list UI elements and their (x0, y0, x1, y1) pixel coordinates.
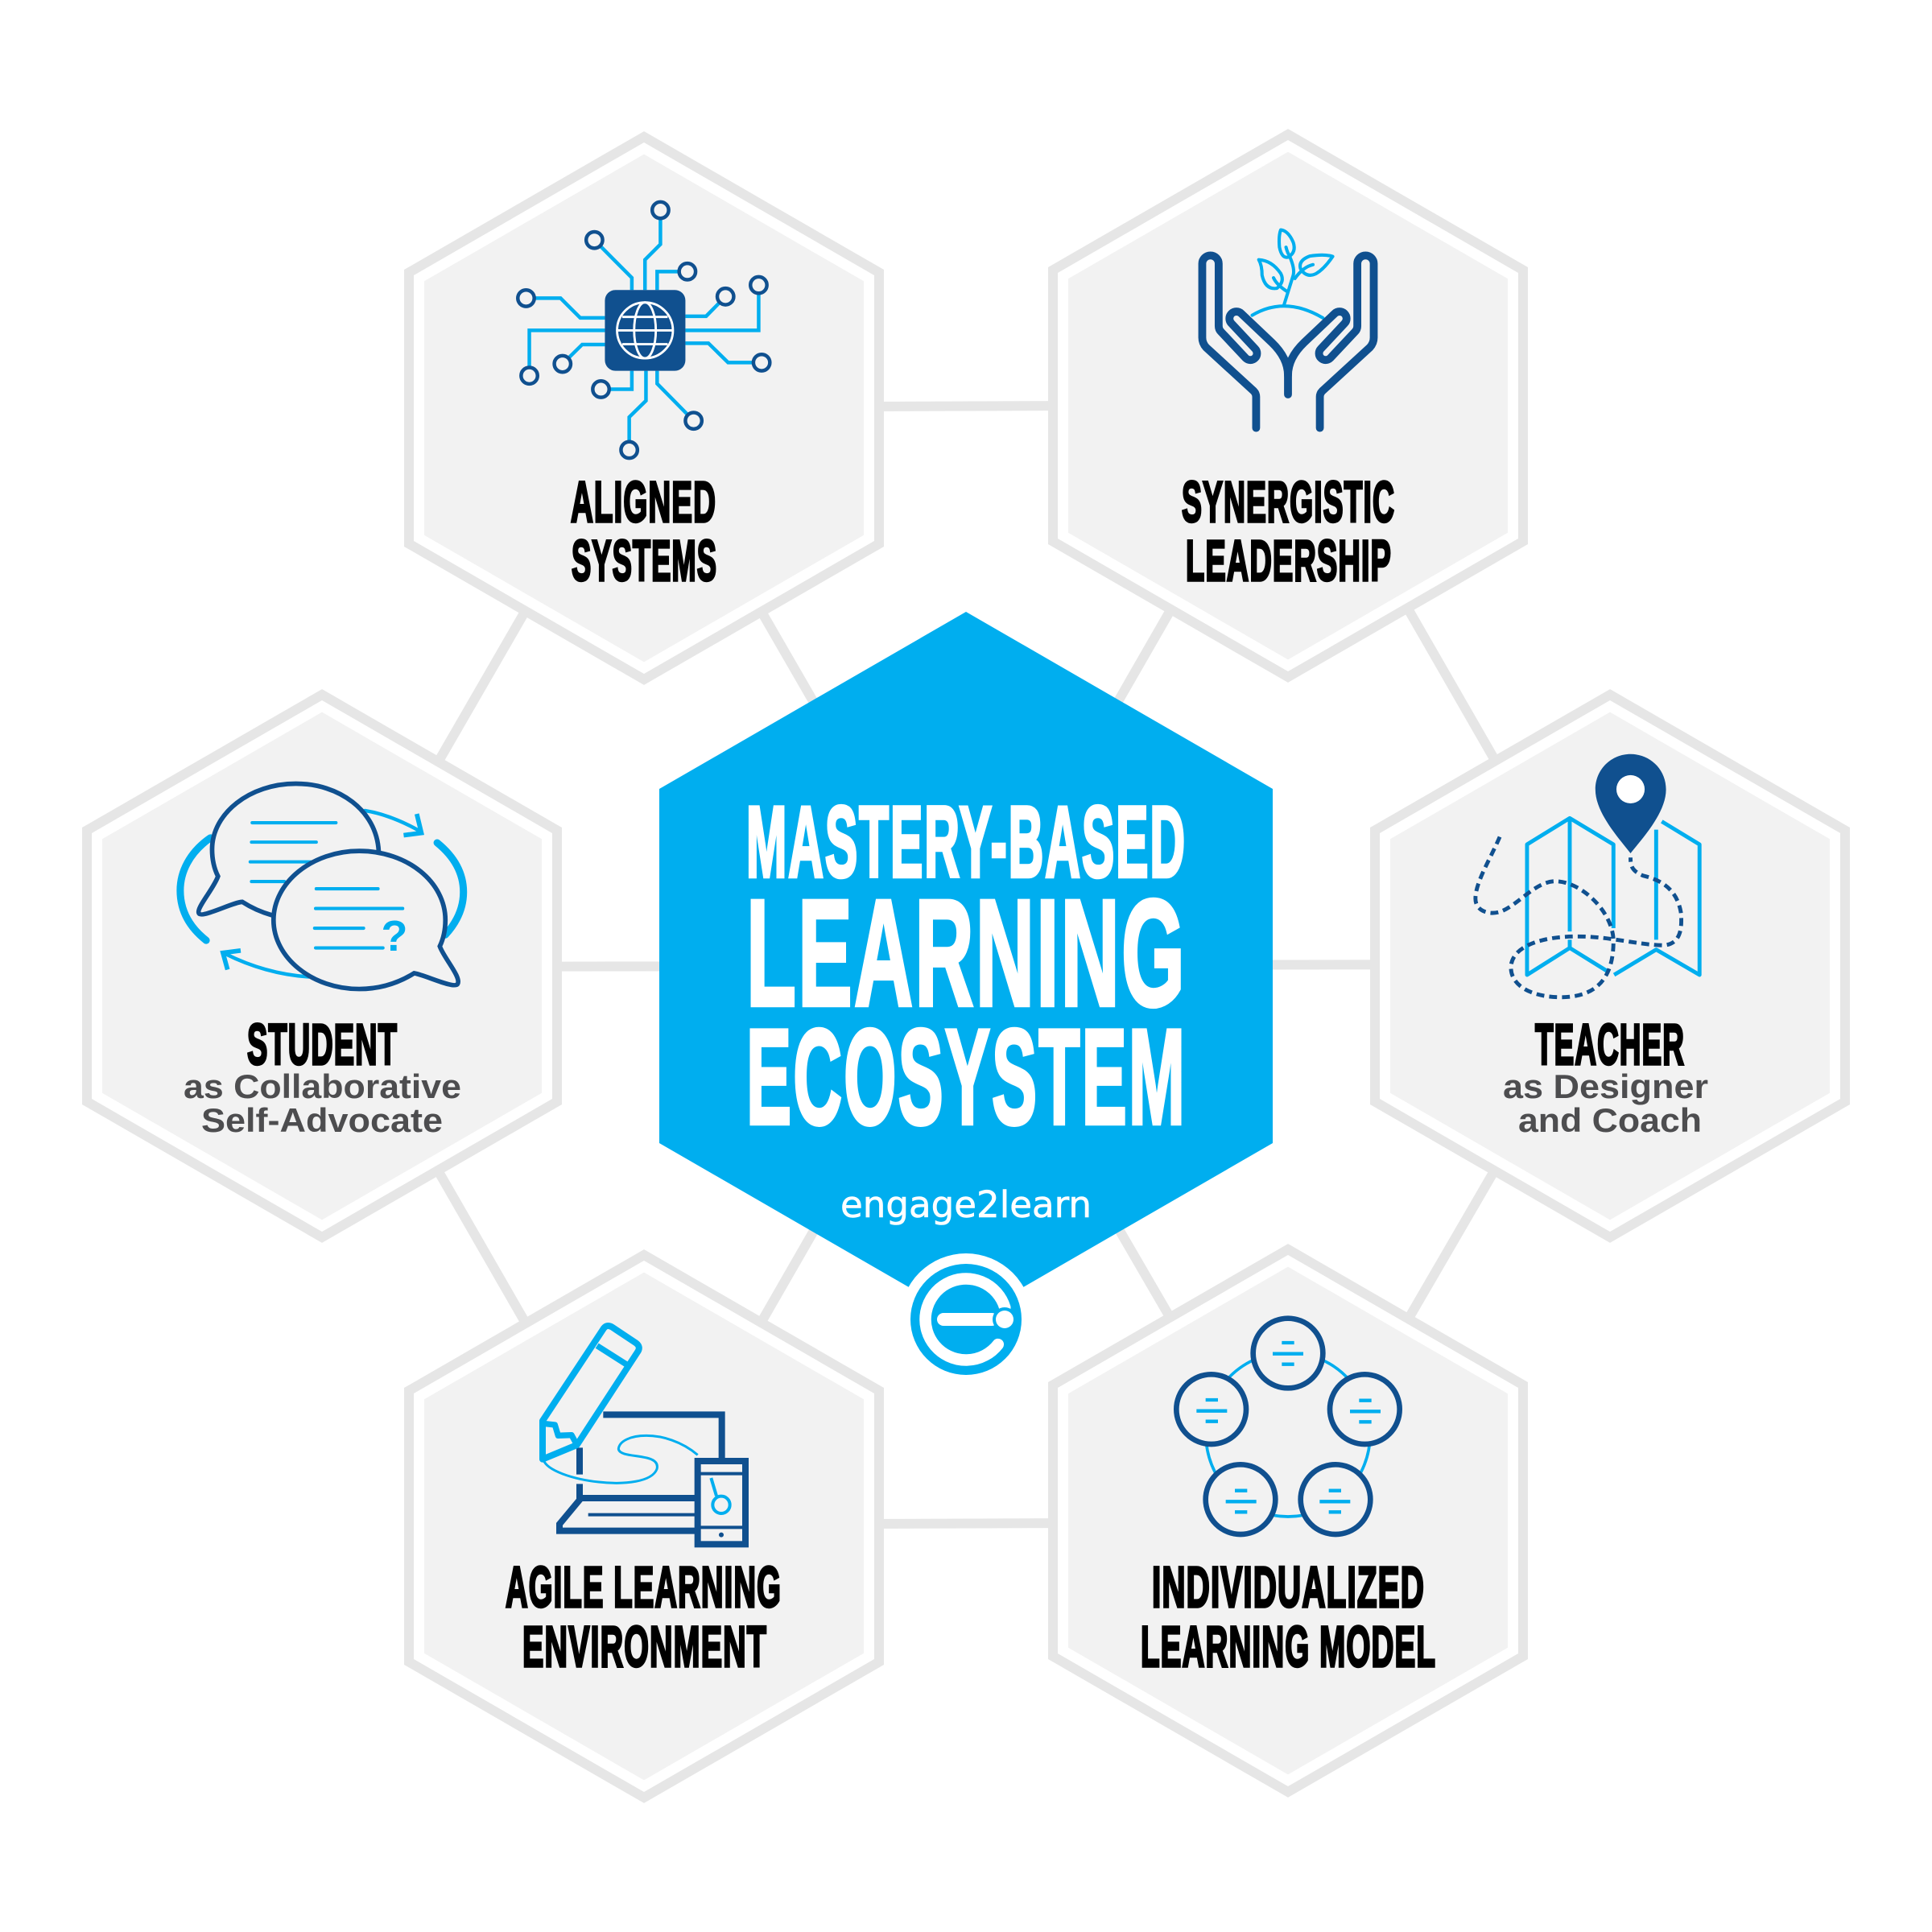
heading: synergistic leadership: SYNERGISTIC (1182, 471, 1395, 535)
heading: aligned systems (571, 471, 717, 593)
heading: teacher: TEACHER (1535, 1013, 1685, 1077)
panel: agile learning environment (409, 1255, 879, 1798)
panel: teacher (1375, 695, 1845, 1237)
panel: central hexagon: MASTERY-BASED (746, 786, 1187, 898)
panel: aligned systems (409, 137, 879, 679)
heading: individualized learning model (1141, 1556, 1436, 1679)
panel: central hexagon: ECOSYSTEM (746, 1001, 1187, 1153)
heading: individualized learning model: LEARNING MODEL (1141, 1616, 1436, 1679)
heading: synergistic leadership (1182, 471, 1395, 593)
subheading: as collaborative self-advocate: as Collaborative (184, 1067, 461, 1105)
icon: hands holding a seedling (1202, 230, 1374, 428)
heading: agile learning environment: ENVIRONMENT (522, 1616, 767, 1679)
heading: aligned systems: SYSTEMS (572, 530, 717, 593)
icon: speech bubbles with arrows (180, 783, 464, 989)
panel: synergistic leadership (1053, 134, 1523, 677)
subheading: as designer and coach: as Designer (1503, 1067, 1708, 1105)
title: mastery-based learning ecosystem: LEARNING (746, 869, 1187, 1038)
icon: circuit chip with globe (518, 202, 770, 458)
subheading: as designer and coach (1503, 1067, 1708, 1139)
subheading: as designer and coach: and Coach (1518, 1101, 1702, 1139)
heading: student: STUDENT (247, 1013, 398, 1077)
panel: central hexagon (659, 612, 1273, 1385)
panel: individualized learning model (1053, 1249, 1523, 1792)
icon: folded map with pin and dashed route (1476, 754, 1699, 997)
connector lines between hexagons (320, 405, 1613, 1526)
heading: individualized learning model: INDIVIDUALIZED (1152, 1556, 1425, 1620)
icon: pencil drawing on laptop and phone (543, 1326, 745, 1544)
subheading: as collaborative self-advocate: Self-Advocate (201, 1101, 443, 1139)
heading: aligned systems: ALIGNED (571, 471, 716, 535)
heading: synergistic leadership: LEADERSHIP (1186, 530, 1392, 593)
icon: engage2learn logo (900, 1253, 1032, 1385)
heading: agile learning environment: AGILE LEARNING (506, 1556, 782, 1620)
icon: ring of five nodes with division signs (1176, 1319, 1400, 1534)
title: mastery-based learning ecosystem (746, 786, 1187, 1153)
subheading: as collaborative self-advocate (184, 1067, 461, 1139)
icon: speech bubbles with arrows: ? (382, 912, 407, 960)
brand name: engage2learn (840, 1183, 1092, 1226)
heading: agile learning environment (506, 1556, 782, 1679)
panel: student (87, 695, 557, 1237)
